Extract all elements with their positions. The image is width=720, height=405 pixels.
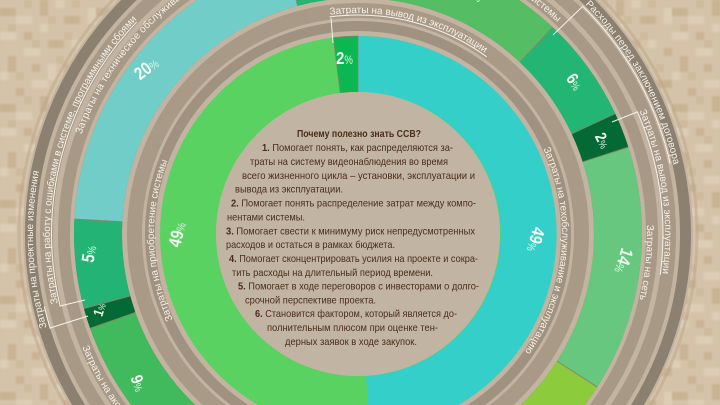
text block: why it is useful to know TCO: вывода из эксплуатации. bbox=[235, 184, 343, 196]
label: pre-contract expenses: Расходы перед заключением договора bbox=[586, 0, 678, 165]
text block: why it is useful to know TCO: полнительным плюсом при оценке тен- bbox=[267, 322, 438, 334]
value: 6%: 6% bbox=[562, 70, 586, 94]
text block: why it is useful to know TCO: тить расходы на длительный период времени. bbox=[232, 267, 433, 279]
heading: Почему полезно знать ССВ? bbox=[297, 128, 421, 140]
value: 49% right: 49% bbox=[522, 225, 548, 255]
label: project change cost: Затраты на проектные изменения bbox=[28, 170, 46, 328]
text block: why it is useful to know TCO: 6. Становится фактором, который является до- bbox=[255, 308, 457, 320]
value: 2% outer: 2% bbox=[591, 130, 613, 152]
value: 9%: 9% bbox=[126, 373, 149, 394]
text block: why it is useful to know TCO: дерных заявок в ходе закупок. bbox=[285, 336, 417, 348]
text block: why it is useful to know TCO: срочной перспективе проекта. bbox=[245, 294, 376, 306]
label: maintenance and operation cost: Затраты на техобслуживание и эксплуатацию bbox=[526, 147, 570, 354]
text block: why it is useful to know TCO: 1. Помогает понять, как распределяются за- bbox=[262, 142, 453, 154]
label: network cost: Затраты на сеть bbox=[640, 225, 654, 300]
label: decommissioning cost, inner ring: Затраты на вывод из эксплуатации bbox=[330, 8, 488, 52]
label: system acquisition cost: Затраты на приобретение системы bbox=[146, 160, 172, 322]
text block: why it is useful to know TCO: 4. Помогает сконцентрировать усилия на проекте и сокра- bbox=[229, 253, 478, 265]
text block: why it is useful to know TCO: траты на систему видеонаблюдения во время bbox=[250, 156, 448, 168]
label: errors and software failures cost: Затраты на работу с ошибками в системе, программными сбоями bbox=[42, 16, 136, 304]
value: 5%: 5% bbox=[78, 244, 101, 264]
panel: central circle bbox=[216, 92, 500, 376]
text block: why it is useful to know TCO: расходов и остаться в рамках бюджета. bbox=[226, 239, 395, 251]
value: 14%: 14% bbox=[610, 246, 636, 276]
text block: why it is useful to know TCO: 5. Помогает в ходе переговоров с инвесторами о долго- bbox=[238, 280, 479, 292]
text block: why it is useful to know TCO: 3. Помогает свести к минимуму риск непредусмотренных bbox=[226, 226, 476, 238]
text block: why it is useful to know TCO: 2. Помогает понять распределение затрат между компо- bbox=[231, 198, 476, 210]
value: 1%: 1% bbox=[90, 300, 109, 318]
text block: why it is useful to know TCO bbox=[226, 128, 479, 348]
chart: inner donut of cost shares bbox=[188, 36, 557, 405]
text block: why it is useful to know TCO: всего жизненного цикла – установки, эксплуатации и bbox=[242, 170, 475, 182]
value: 20%: 20% bbox=[131, 53, 163, 84]
value: 49% left: 49% bbox=[165, 220, 190, 249]
text block: why it is useful to know TCO: нентами системы. bbox=[227, 212, 305, 224]
label: decommissioning cost, outer ring: Затраты на вывод из эксплуатации bbox=[640, 109, 670, 274]
value: 2% inner: 2% bbox=[336, 49, 353, 68]
